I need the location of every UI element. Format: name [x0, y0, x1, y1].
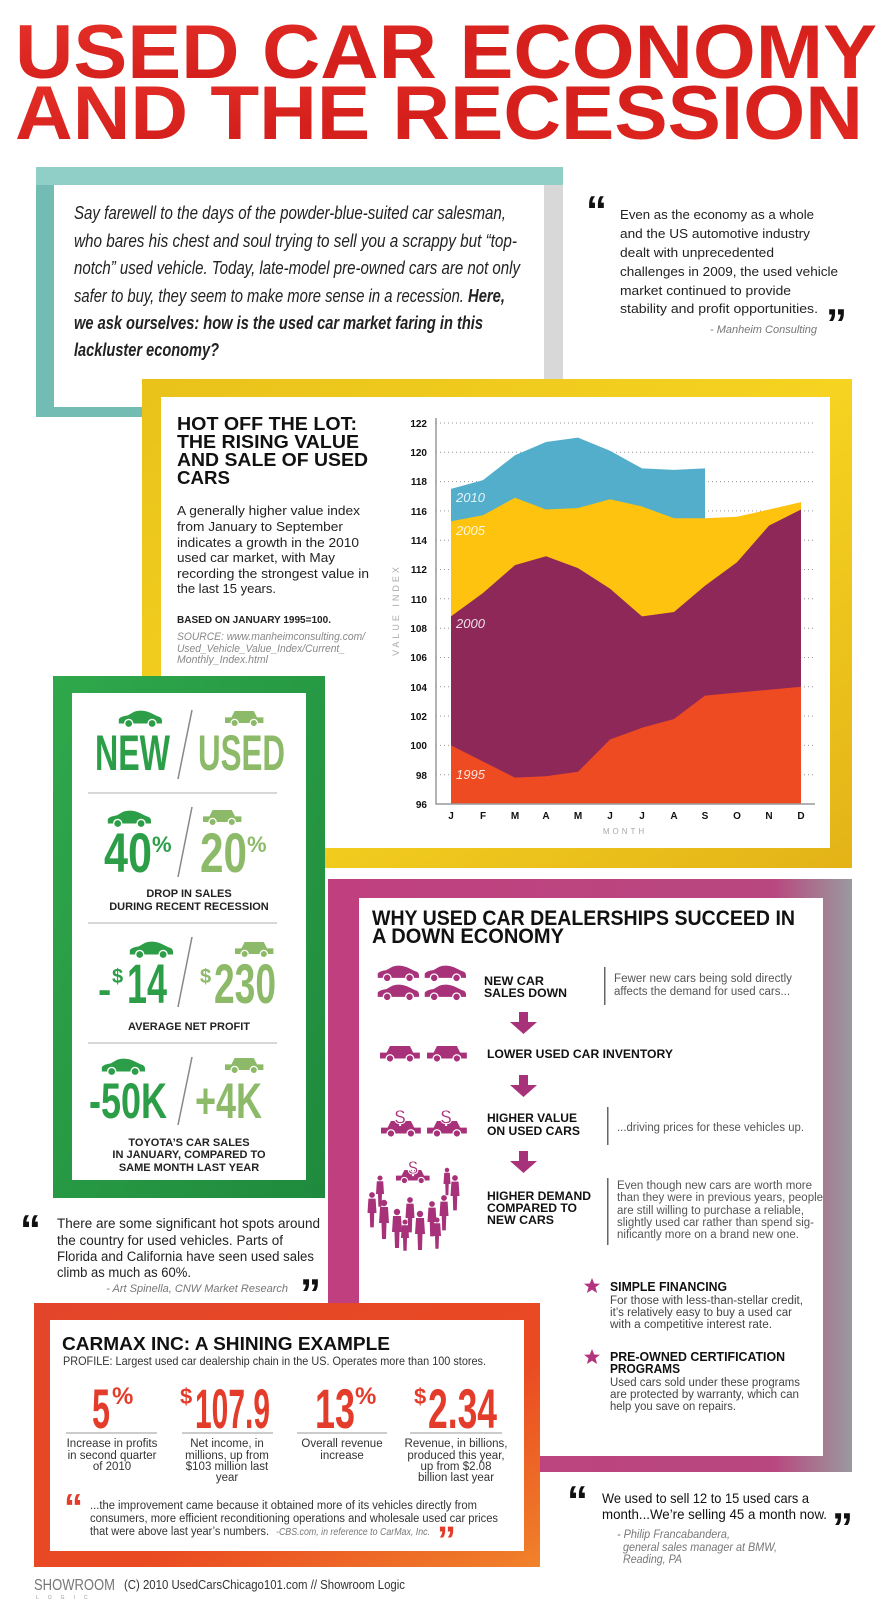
callout: BMW quote: We used to sell 12 to 15 used cars a	[602, 1490, 809, 1506]
arrow	[510, 1151, 537, 1173]
callout: BMW quote	[567, 1477, 853, 1566]
chart description: the last 15 years.	[177, 581, 276, 596]
panel: carmax: Overall revenue	[301, 1438, 383, 1450]
area chart: J	[639, 811, 645, 822]
callout: Manheim quote: and the US automotive industry	[620, 226, 811, 241]
area chart: 2010	[455, 490, 486, 505]
stats: 107.9	[195, 1377, 270, 1440]
chart description: SOURCE: www.manheimconsulting.com/	[177, 631, 366, 643]
panel: why dealerships succeed	[328, 879, 852, 1472]
intro text: lackluster economy?	[74, 340, 219, 360]
bullet: simple financing: with a competitive interest rate.	[609, 1319, 772, 1331]
panel: carmax: millions, up from	[185, 1450, 269, 1462]
callout: Spinella quote: “	[20, 1206, 41, 1253]
stat: drop in sales: %	[247, 832, 267, 857]
panel: carmax: in second quarter	[68, 1450, 157, 1462]
area chart: 114	[411, 536, 427, 547]
area chart: M	[511, 811, 519, 822]
chart description: indicates a growth in the 2010	[177, 535, 359, 550]
stat: average net profit: 14	[127, 952, 167, 1015]
intro text: notch” used vehicle. Today, late-model pre-owned cars are not only	[74, 258, 521, 278]
callout: Manheim quote: challenges in 2009, the used vehicle	[620, 264, 838, 279]
stats: %	[112, 1383, 133, 1410]
step 4: higher demand: NEW CARS	[487, 1213, 554, 1227]
stat: toyota sales: SAME MONTH LAST YEAR	[119, 1162, 259, 1174]
footer: SHOWROOM	[34, 1577, 115, 1594]
step 4: higher demand: are still willing to purchase a reliable,	[617, 1205, 804, 1217]
area chart: 96	[416, 800, 427, 811]
stats	[92, 1377, 497, 1440]
step 3: higher value: HIGHER VALUE	[487, 1111, 577, 1125]
callout: Spinella quote: climb as much as 60%.	[57, 1265, 191, 1280]
step 3: higher value: $	[440, 1107, 452, 1129]
step 4: higher demand: COMPARED TO	[487, 1201, 577, 1215]
chart description: from January to September	[177, 519, 344, 534]
area chart: 102	[410, 712, 427, 723]
stat: drop in sales: DROP IN SALES	[146, 888, 232, 900]
stat: average net profit: -	[98, 968, 111, 1012]
callout: Spinella quote: the country for used vehicles. Parts of	[57, 1233, 283, 1248]
stat: toyota sales: +4K	[195, 1073, 262, 1129]
panel: carmax: PROFILE: Largest used car dealership chain in the US. Operates more than 100 stores.	[63, 1354, 486, 1368]
area chart: 120	[410, 448, 427, 459]
bullet: certification programs: help you save on repairs.	[610, 1401, 736, 1413]
step 3: higher value	[381, 1107, 804, 1145]
stat: average net profit: $	[112, 966, 123, 988]
panel: carmax: year	[216, 1472, 238, 1484]
callout: Spinella quote: ”	[300, 1270, 321, 1317]
panel: carmax: billion last year	[418, 1472, 494, 1484]
quote: CBS: ”	[437, 1520, 456, 1562]
bullet: simple financing: it’s relatively easy to buy a used car	[610, 1307, 792, 1319]
area chart: J	[448, 811, 454, 822]
chart description: Used_Vehicle_Value_Index/Current_	[177, 643, 345, 655]
area chart: 118	[411, 477, 427, 488]
area chart: 116	[411, 507, 427, 518]
area chart: 104	[410, 683, 427, 694]
arrow	[510, 1075, 537, 1097]
chart description: used car market, with May	[177, 550, 336, 565]
step 4: higher demand: HIGHER DEMAND	[487, 1189, 591, 1203]
panel: new vs used	[53, 676, 325, 1198]
step 4: higher demand	[368, 1158, 823, 1251]
chart heading: HOT OFF THE LOT:	[177, 414, 357, 434]
quote: CBS: -CBS.com, in reference to CarMax, Inc.	[276, 1527, 430, 1538]
stats: $	[180, 1384, 192, 1409]
area chart: S	[702, 811, 709, 822]
intro text	[74, 203, 521, 360]
area chart: 2000	[455, 616, 486, 631]
stat: new / used	[95, 725, 285, 781]
step 2: lower inventory	[380, 1046, 673, 1062]
quote: CBS: consumers, more efficient reconditioning operations and wholesale used car prices	[90, 1513, 498, 1525]
callout: BMW quote: Reading, PA	[623, 1554, 682, 1566]
stat: drop in sales: DURING RECENT RECESSION	[109, 901, 269, 913]
quote: CBS: ...the improvement came because it obtained more of its vehicles directly from	[90, 1500, 477, 1512]
step 4: higher demand: than they were in previous years, people	[617, 1192, 823, 1204]
quote: CBS: that were above last year’s numbers.	[90, 1526, 269, 1538]
quote: CBS: “	[64, 1487, 83, 1529]
bullet: simple financing: SIMPLE FINANCING	[610, 1280, 727, 1294]
heading: CARMAX INC: A SHINING EXAMPLE	[62, 1334, 390, 1354]
area chart: O	[733, 811, 741, 822]
chart description: recording the strongest value in	[177, 566, 369, 581]
callout: BMW quote: “	[567, 1477, 588, 1524]
callout: Manheim quote: ”	[826, 300, 847, 347]
callout: Manheim quote: stability and profit opportunities.	[620, 301, 818, 316]
stat: average net profit: $	[200, 966, 211, 988]
stats: 2.34	[428, 1377, 497, 1440]
quote: CBS	[64, 1487, 498, 1562]
title: AND THE RECESSION	[15, 71, 863, 156]
stat: average net profit: AVERAGE NET PROFIT	[128, 1021, 250, 1033]
callout: Manheim quote	[586, 187, 847, 347]
area chart	[391, 418, 815, 836]
stat: drop in sales: 20	[200, 821, 247, 884]
area chart: F	[480, 811, 486, 822]
area chart: 106	[410, 653, 427, 664]
step 1: new car sales down: Fewer new cars being sold directly	[614, 973, 792, 985]
callout: Manheim quote: dealt with unprecedented	[620, 245, 774, 260]
area chart: 122	[410, 419, 427, 430]
step 4: higher demand: $	[408, 1158, 418, 1178]
step 1: new car sales down: affects the demand for used cars...	[614, 986, 790, 998]
chart description	[177, 503, 369, 666]
panel: carmax: Net income, in	[190, 1438, 264, 1450]
icons: green cars	[102, 711, 273, 1076]
panel: carmax: of 2010	[93, 1461, 131, 1473]
stat: new / used: NEW	[95, 725, 171, 781]
area chart: 98	[416, 771, 427, 782]
stats: $	[414, 1384, 426, 1409]
area chart: 100	[410, 741, 427, 752]
callout: BMW quote: month...We’re selling 45 a month now.	[602, 1506, 827, 1522]
area chart: A	[670, 811, 678, 822]
panel: carmax	[34, 1303, 540, 1567]
panel: value chart	[142, 379, 852, 868]
callout: Spinella quote: Florida and California have seen used sales	[57, 1249, 314, 1264]
stat: average net profit: 230	[214, 952, 276, 1015]
callout: BMW quote: - Philip Francabandera,	[617, 1529, 730, 1541]
stat: toyota sales	[89, 1073, 266, 1174]
callout: Spinella quote: - Art Spinella, CNW Market Research	[106, 1283, 288, 1295]
step 1: new car sales down: NEW CAR	[484, 974, 544, 988]
intro text: Say farewell to the days of the powder-blue-suited car salesman,	[74, 203, 506, 223]
stat: toyota sales: TOYOTA’S CAR SALES	[128, 1137, 250, 1149]
bullet: certification programs: PRE-OWNED CERTIFICATION	[610, 1350, 785, 1364]
panel: carmax: Increase in profits	[67, 1438, 158, 1450]
step 4: higher demand: slightly used car rather than spend sig-	[617, 1217, 814, 1229]
stat: drop in sales: %	[152, 832, 172, 857]
step 4: higher demand: nificantly more on a brand new one.	[617, 1229, 799, 1241]
area chart: D	[797, 811, 805, 822]
step 1: new car sales down: SALES DOWN	[484, 986, 567, 1000]
heading: A DOWN ECONOMY	[372, 925, 564, 948]
area chart: 112	[411, 565, 427, 576]
callout: Spinella quote: There are some significant hot spots around	[57, 1216, 320, 1231]
heading	[372, 907, 795, 948]
callout: BMW quote: ”	[832, 1504, 853, 1551]
chart heading: THE RISING VALUE	[177, 432, 359, 452]
area chart: 108	[410, 624, 427, 635]
callout: Manheim quote: market continued to provide	[620, 283, 791, 298]
heading: WHY USED CAR DEALERSHIPS SUCCEED IN	[372, 907, 795, 930]
chart heading: CARS	[177, 468, 230, 488]
area chart: 2005	[455, 523, 486, 538]
chart description: Monthly_Index.html	[177, 654, 269, 666]
panel: intro	[36, 167, 563, 417]
panel: carmax: increase	[320, 1450, 364, 1462]
chart description: A generally higher value index	[177, 503, 361, 518]
step 3: higher value: ...driving prices for these vehicles up.	[617, 1122, 804, 1134]
footer	[34, 1577, 405, 1600]
area chart: 110	[411, 595, 427, 606]
bullet: certification programs: are protected by warranty, which can	[610, 1389, 799, 1401]
callout: Manheim quote: Even as the economy as a whole	[620, 207, 814, 222]
area chart: A	[542, 811, 550, 822]
stats: 13	[315, 1377, 355, 1440]
callout: Manheim quote: - Manheim Consulting	[710, 324, 818, 336]
area chart: VALUE INDEX	[391, 564, 401, 656]
stats: 5	[92, 1377, 110, 1440]
stat: new / used: USED	[198, 725, 285, 781]
chart description: BASED ON JANUARY 1995=100.	[177, 614, 331, 626]
arrow	[510, 1012, 537, 1034]
chart heading	[177, 414, 368, 488]
stat: toyota sales: -50K	[89, 1073, 167, 1129]
stat: drop in sales: 40	[104, 821, 152, 884]
panel: carmax: produced this year,	[407, 1450, 505, 1462]
stat: toyota sales: IN JANUARY, COMPARED TO	[112, 1149, 266, 1161]
area chart: 1995	[456, 767, 486, 782]
panel: carmax: $103 million last	[186, 1461, 269, 1473]
area chart: J	[607, 811, 613, 822]
bullet: certification programs	[584, 1349, 800, 1413]
stats: %	[355, 1383, 376, 1410]
intro text: safer to buy, they seem to make more sense in a recession. Here,	[74, 286, 505, 306]
area chart: N	[765, 811, 773, 822]
step 3: higher value: $	[394, 1107, 406, 1129]
area chart: MONTH	[603, 827, 647, 836]
callout: Manheim quote: “	[586, 187, 607, 234]
intro text: we ask ourselves: how is the used car market faring in this	[74, 313, 483, 333]
bullet: simple financing: For those with less-than-stellar credit,	[610, 1295, 803, 1307]
area chart: M	[574, 811, 582, 822]
title: USED CAR ECONOMY	[15, 10, 877, 95]
bullet: certification programs: PROGRAMS	[610, 1362, 680, 1376]
bullet: simple financing	[584, 1278, 803, 1331]
step 2: lower inventory: LOWER USED CAR INVENTORY	[487, 1047, 673, 1061]
step 3: higher value: ON USED CARS	[487, 1124, 580, 1138]
step 1: new car sales down	[378, 966, 792, 1005]
footer: (C) 2010 UsedCarsChicago101.com // Showroom Logic	[124, 1577, 405, 1592]
stat: average net profit	[98, 952, 276, 1033]
bullet: certification programs: Used cars sold under these programs	[610, 1377, 800, 1389]
callout: Spinella quote	[20, 1206, 321, 1317]
step 4: higher demand: Even though new cars are worth more	[617, 1180, 812, 1192]
chart heading: AND SALE OF USED	[177, 450, 368, 470]
stat: drop in sales	[104, 821, 269, 913]
callout: BMW quote: general sales manager at BMW,	[623, 1542, 777, 1554]
title	[15, 10, 877, 156]
intro text: who bares his chest and soul trying to sell you a scrappy but “top-	[74, 231, 517, 251]
panel: carmax: up from $2.08	[421, 1461, 491, 1473]
panel: carmax: Revenue, in billions,	[405, 1438, 507, 1450]
